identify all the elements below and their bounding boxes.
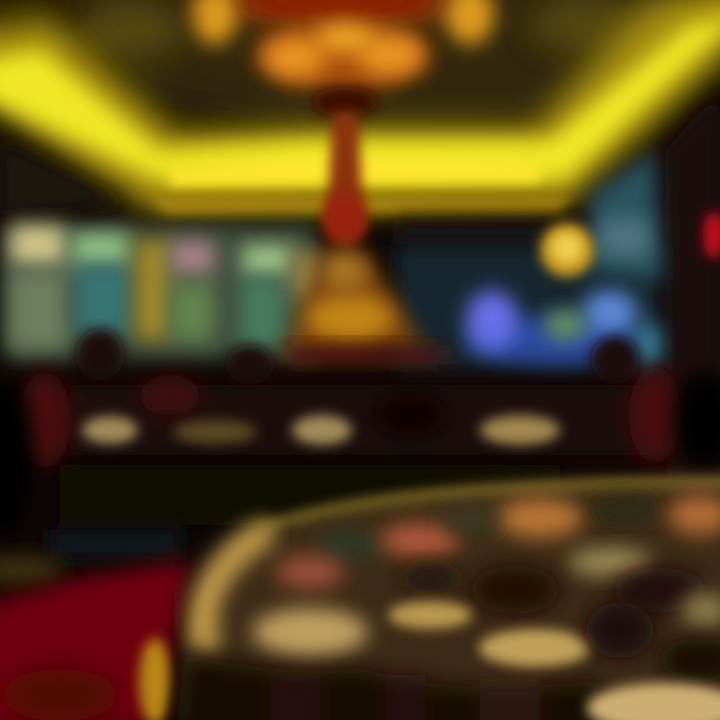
central column [285,112,445,365]
left screens [5,225,322,385]
dark foreground silhouettes [0,370,720,560]
chandelier [190,0,494,117]
ceiling recess [0,0,700,125]
gaming table [179,482,720,720]
wall band below the ceiling [0,90,720,520]
gold table arc [139,638,171,720]
yellow ceiling glow [0,0,720,214]
bar counter [19,367,681,468]
red chair [0,560,190,720]
right screen [395,150,662,384]
table base [175,655,600,720]
foreground bright plate [587,683,720,720]
lower-left gold edge [0,556,65,584]
red wall light [703,211,720,259]
